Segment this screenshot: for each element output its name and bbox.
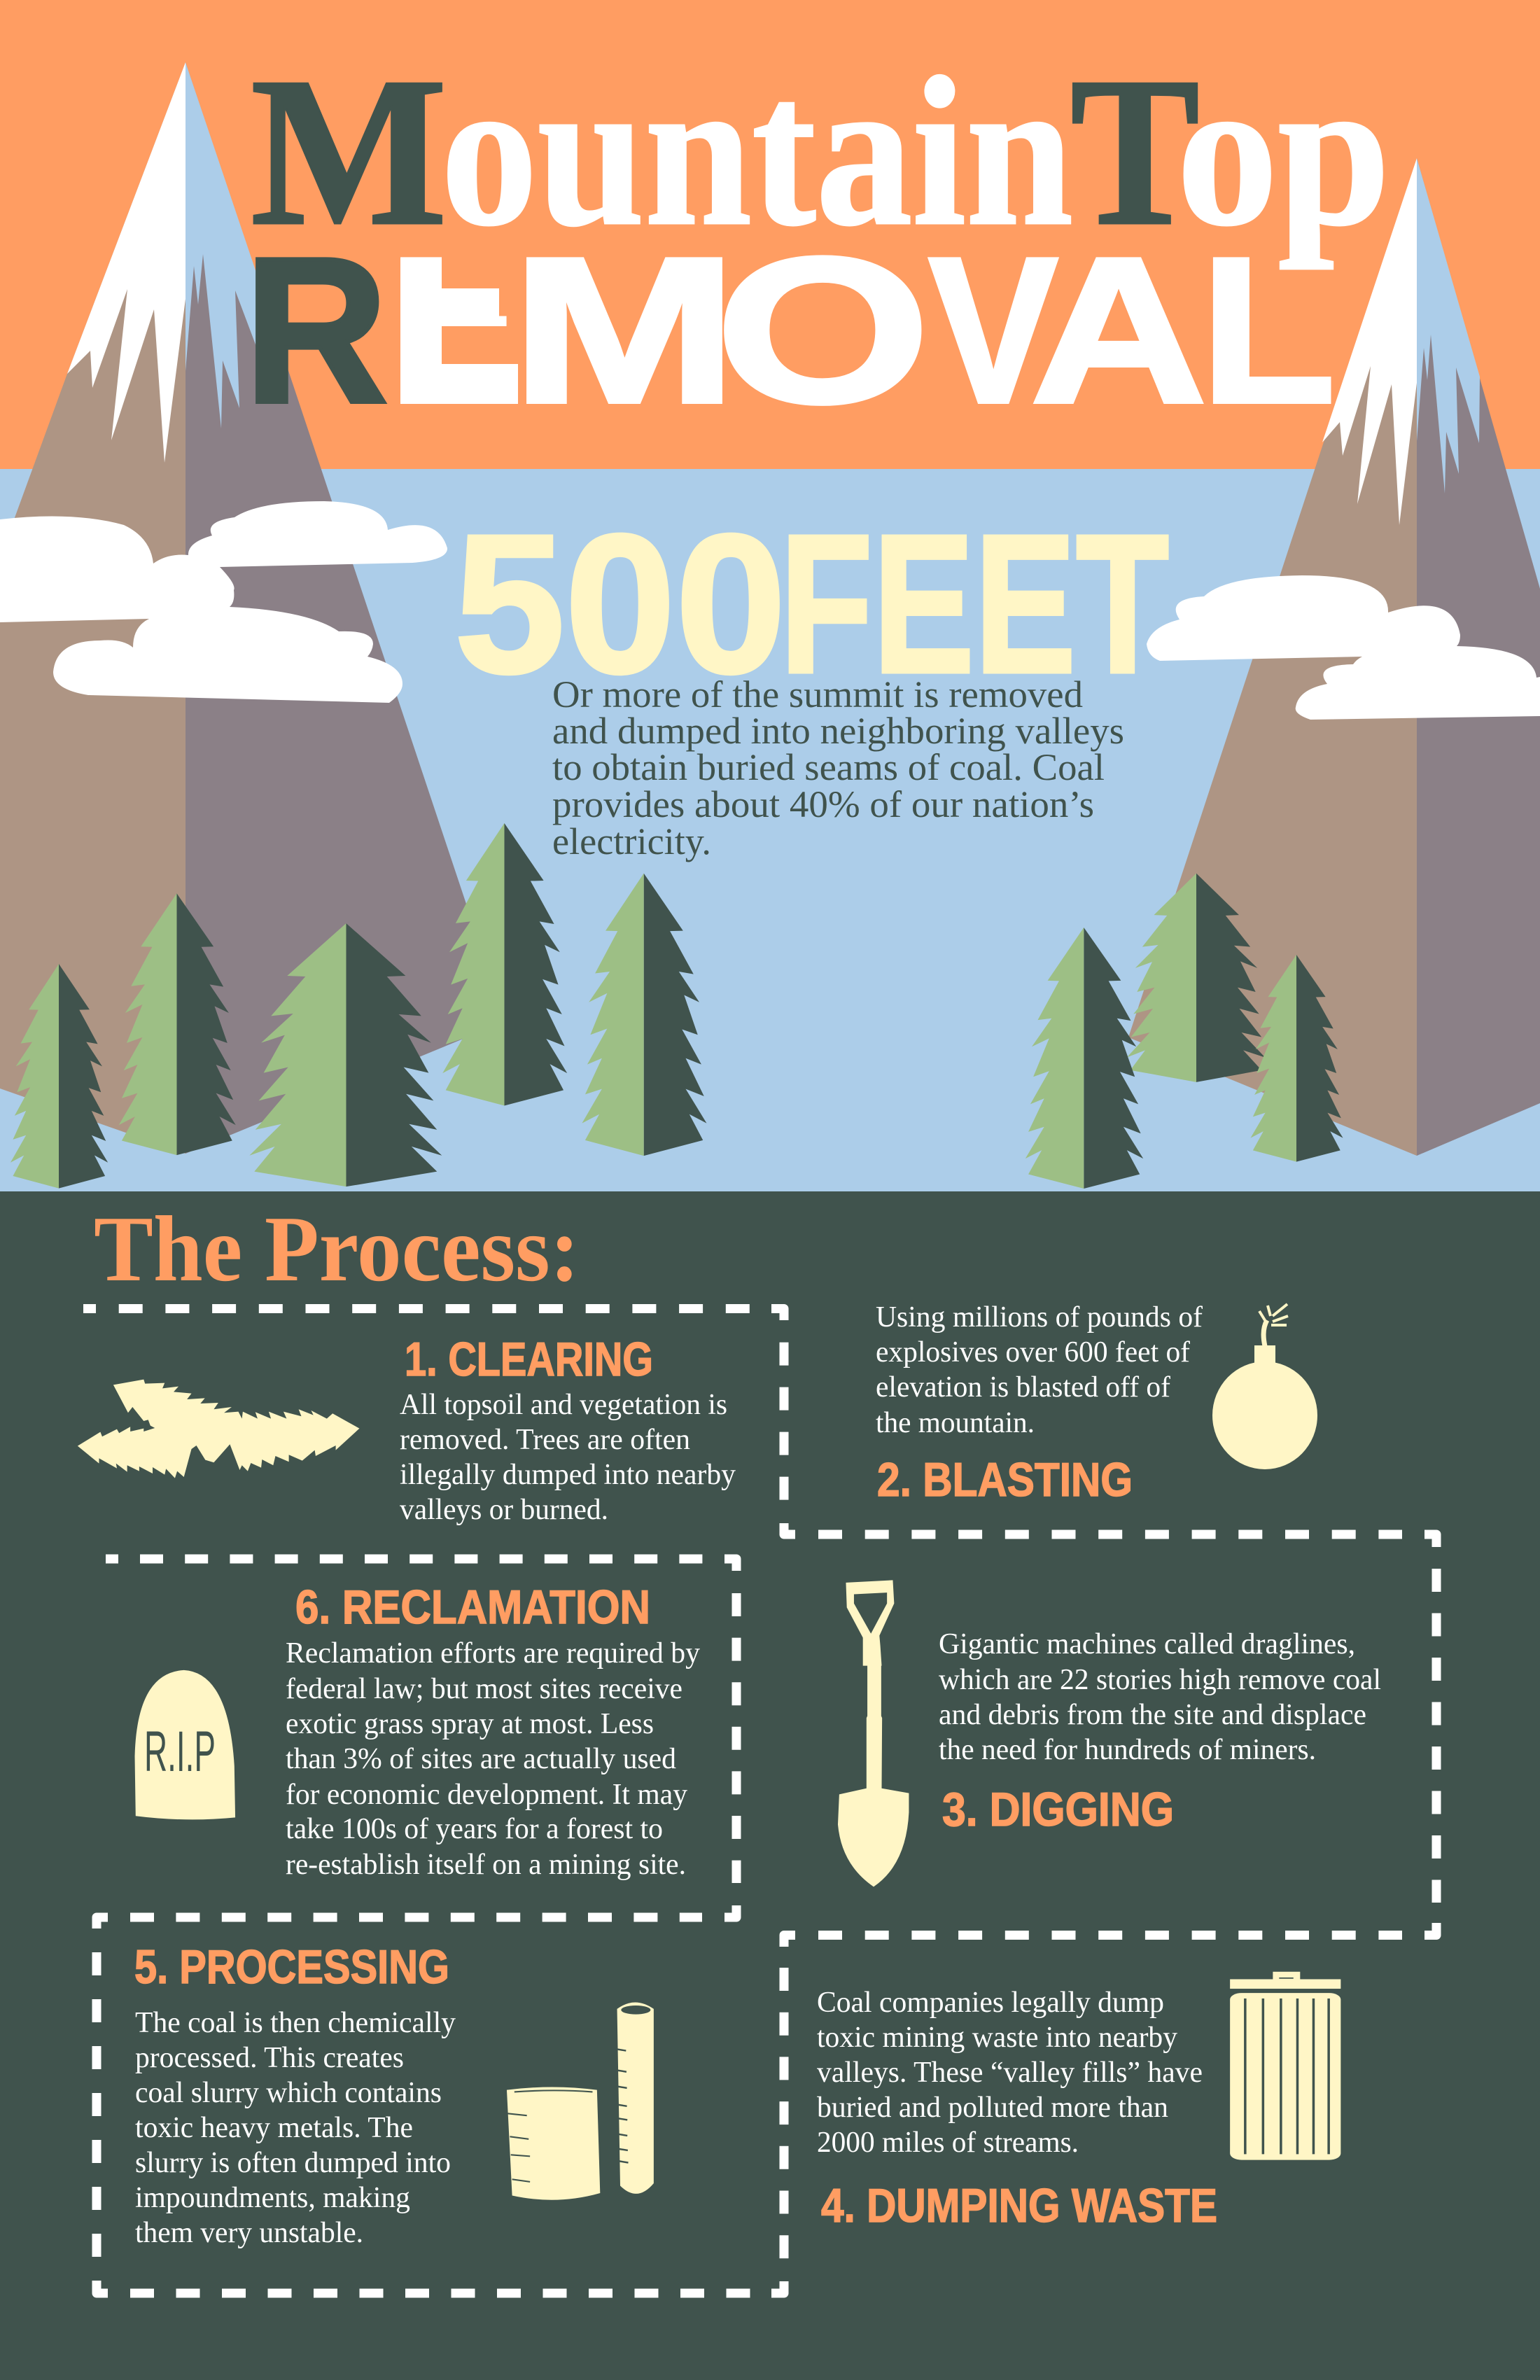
heading: The Process: The Process:	[94, 1197, 580, 1301]
heading: 1. Clearing: 1. CLEARING	[405, 1333, 653, 1386]
text: reclamation description: Reclamation efforts are required by	[286, 1637, 700, 1670]
step 2: blasting	[876, 1301, 1317, 1506]
title: Removal: L	[1200, 214, 1336, 446]
intro paragraph: Or more of the summit is removed	[552, 673, 1083, 715]
text: processing description: impoundments, making	[135, 2182, 410, 2214]
icon: bomb	[1212, 1304, 1317, 1469]
headline: 500 FEET: 500	[454, 493, 786, 714]
text: blasting description: explosives over 600 feet of	[876, 1336, 1190, 1368]
text: clearing description: valleys or burned.	[400, 1494, 608, 1526]
title: Removal: M	[511, 214, 738, 446]
title: Mountain Top: op	[1177, 33, 1390, 270]
intro paragraph: and dumped into neighboring valleys	[552, 710, 1124, 752]
step 3: digging	[838, 1580, 1381, 1886]
background: orange sky band	[0, 0, 1540, 469]
heading: 5. Processing: 5. PROCESSING	[134, 1940, 449, 1994]
text: reclamation description: take 100s of years for a forest to	[286, 1813, 663, 1845]
text: digging description: the need for hundreds of miners.	[939, 1734, 1316, 1766]
clouds: right	[1147, 575, 1540, 720]
intro paragraph	[552, 673, 1124, 862]
text: reclamation description: federal law; but most sites receive	[286, 1673, 682, 1705]
text: dumping description	[817, 1987, 1203, 2159]
icon: tombstone: R.I.P	[144, 1720, 216, 1784]
text: processing description: processed. This creates	[135, 2042, 404, 2074]
text: reclamation description: exotic grass spray at most. Less	[286, 1708, 654, 1740]
step 6: reclamation	[135, 1581, 700, 1881]
text: processing description: coal slurry which contains	[135, 2077, 442, 2109]
title: Mountain Top: T	[1070, 33, 1200, 270]
background: dark process panel	[0, 1191, 1540, 2380]
text: clearing description: removed. Trees are often	[400, 1424, 690, 1456]
text: digging description	[939, 1628, 1381, 1766]
text: dumping description: toxic mining waste into nearby	[817, 2022, 1177, 2054]
text: reclamation description: re-establish itself on a mining site.	[286, 1849, 686, 1881]
text: processing description: The coal is then chemically	[135, 2007, 456, 2039]
text: reclamation description	[286, 1637, 700, 1881]
headline: 500 FEET	[454, 493, 1169, 714]
intro paragraph: to obtain buried seams of coal. Coal	[552, 746, 1105, 788]
step 1: clearing	[78, 1333, 736, 1526]
title: Removal: A	[1030, 214, 1207, 446]
dashed serpentine border	[83, 1309, 1436, 2293]
step 4: dumping waste	[817, 1972, 1340, 2232]
step 5: processing	[134, 1940, 654, 2249]
title: Removal	[244, 214, 1336, 446]
title: Removal: R	[244, 214, 388, 446]
text: clearing description	[400, 1389, 736, 1526]
heading: 4. Dumping Waste: 4. DUMPING WASTE	[821, 2179, 1217, 2232]
clouds: left	[0, 501, 447, 703]
text: processing description: slurry is often dumped into	[135, 2147, 451, 2179]
text: blasting description: the mountain.	[876, 1407, 1035, 1439]
icon: trash can	[1230, 1972, 1340, 2160]
text: clearing description: illegally dumped into nearby	[400, 1459, 736, 1491]
text: blasting description: elevation is blasted off of	[876, 1371, 1170, 1404]
heading: 6. Reclamation: 6. RECLAMATION	[295, 1581, 650, 1634]
title: Mountain Top: M	[251, 33, 447, 270]
text: reclamation description: than 3% of sites are actually used	[286, 1743, 676, 1775]
text: dumping description: valleys. These “valley fills” have	[817, 2057, 1203, 2089]
text: dumping description: buried and polluted more than	[817, 2092, 1168, 2124]
title: Removal: V	[929, 214, 1058, 446]
text: dumping description: 2000 miles of streams.	[817, 2127, 1079, 2159]
text: dumping description: Coal companies legally dump	[817, 1987, 1164, 2019]
icon: tombstone	[135, 1670, 235, 1819]
left mountain	[0, 62, 505, 1154]
text: digging description: Gigantic machines called draglines,	[939, 1628, 1355, 1660]
icon: fallen branch	[78, 1380, 359, 1478]
intro paragraph: electricity.	[552, 820, 711, 862]
intro paragraph: provides about 40% of our nation’s	[552, 783, 1094, 825]
title: Removal: O	[715, 214, 930, 446]
trees: right group	[1026, 874, 1343, 1189]
trees: left group	[10, 823, 706, 1189]
icon: shovel	[838, 1580, 909, 1886]
text: processing description	[135, 2007, 456, 2249]
text: processing description: them very unstable.	[135, 2217, 363, 2249]
text: digging description: and debris from the site and displace	[939, 1699, 1366, 1731]
heading: 2. Blasting: 2. BLASTING	[877, 1453, 1133, 1506]
icon: beaker and test tube	[507, 2002, 654, 2200]
text: digging description: which are 22 stories high remove coal	[939, 1664, 1381, 1696]
text: blasting description	[876, 1301, 1203, 1439]
text: reclamation description: for economic development. It may	[286, 1779, 687, 1811]
text: blasting description: Using millions of pounds of	[876, 1301, 1203, 1334]
title: Removal: E	[389, 214, 522, 446]
right mountain	[1128, 158, 1540, 1156]
text: clearing description: All topsoil and vegetation is	[400, 1389, 727, 1421]
title: Mountain Top: ountain	[441, 33, 1073, 270]
text: processing description: toxic heavy metals. The	[135, 2112, 413, 2144]
background: blue sky band	[0, 469, 1540, 1191]
title: Mountain Top	[251, 33, 1390, 270]
heading: 3. Digging: 3. DIGGING	[942, 1783, 1174, 1836]
headline: 500 FEET: FEET	[780, 493, 1169, 714]
